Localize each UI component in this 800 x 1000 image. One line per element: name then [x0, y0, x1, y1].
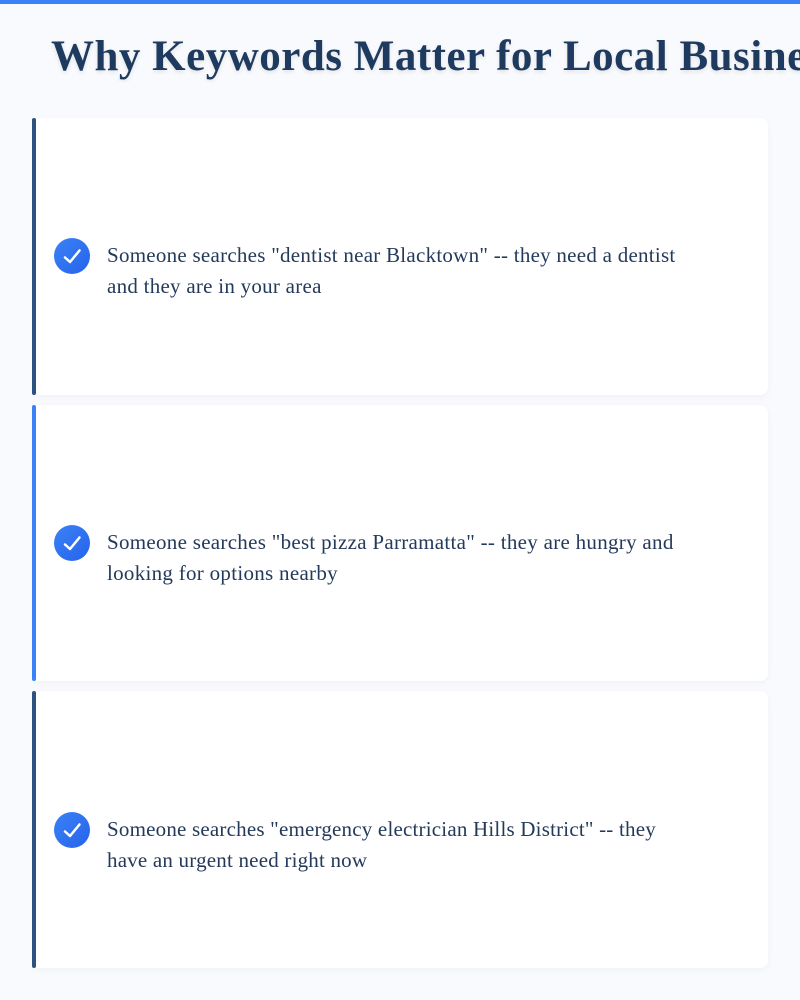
icon: check badge: [54, 812, 90, 848]
text: dentist example: and they are in your area: [107, 274, 322, 298]
text: pizza example: looking for options nearby: [107, 561, 338, 585]
icon: check badge: [54, 525, 90, 561]
text: pizza example: Someone searches "best pizza Parramatta" -- they are hungry and: [107, 530, 674, 554]
text: electrician example: Someone searches "emergency electrician Hills District" -- they: [107, 817, 656, 841]
text: electrician example: [107, 817, 656, 872]
panel: pizza search: [32, 405, 674, 681]
text: dentist example: Someone searches "dentist near Blacktown" -- they need a dentist: [107, 243, 676, 267]
panel: dentist search: [32, 118, 676, 395]
text: electrician example: have an urgent need right now: [107, 848, 367, 872]
top accent bar: [0, 0, 800, 4]
panel: electrician search: [32, 691, 656, 968]
text: pizza example: [107, 530, 674, 585]
text: dentist example: [107, 243, 676, 298]
icon: check badge: [54, 238, 90, 274]
